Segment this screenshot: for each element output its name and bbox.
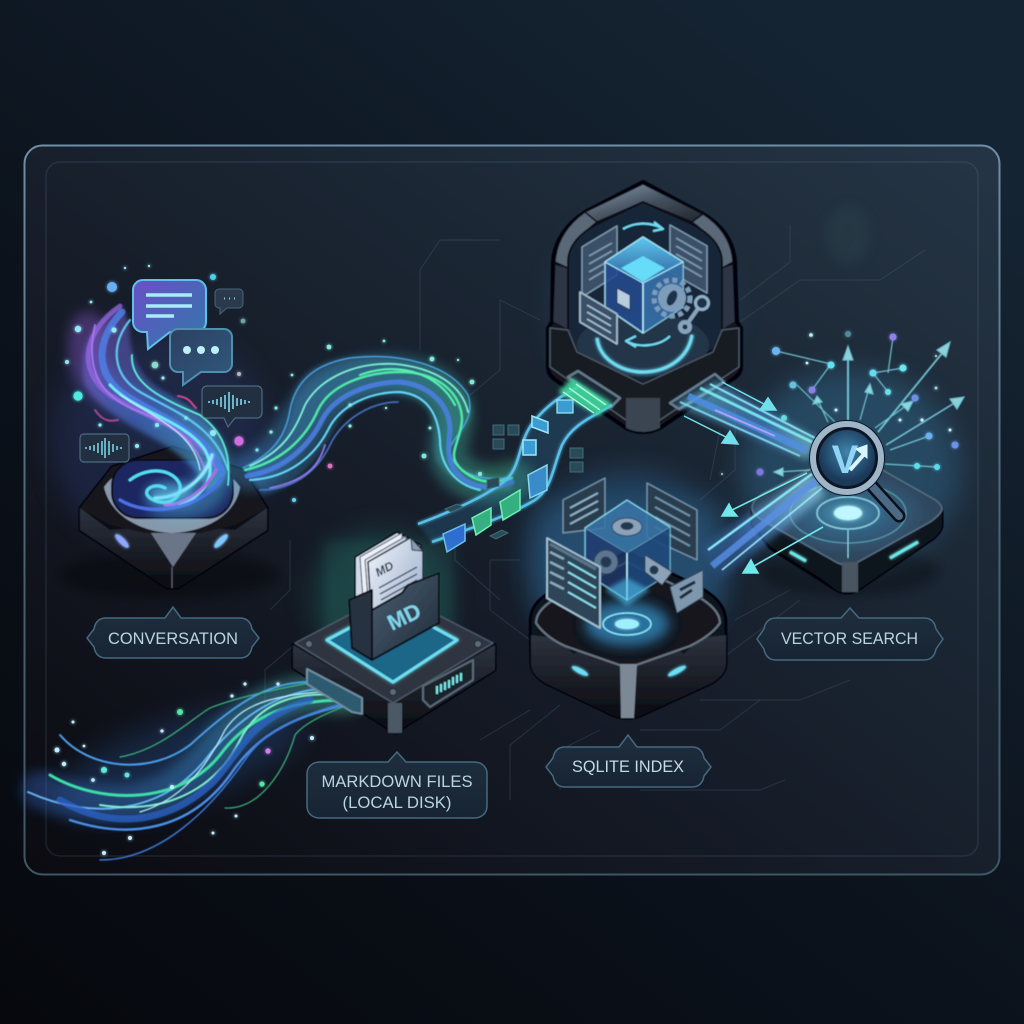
icon: chat bubble with text lines — [133, 280, 206, 349]
top beam light shaft — [844, 275, 848, 345]
icon: glass cube — [605, 237, 683, 333]
icon: audio bubble right — [202, 386, 262, 427]
icon: panel lower left — [580, 292, 617, 344]
arrow: upper beam arrow — [722, 382, 776, 410]
label: conversation — [87, 607, 259, 658]
icon: glowing hologram base — [585, 602, 669, 646]
beam: top device to search — [675, 381, 818, 460]
icon: gear — [654, 280, 690, 316]
icon: chat bubble with dots — [170, 329, 232, 385]
beam: search to sqlite — [702, 472, 825, 582]
particles: bottom-left stream — [54, 682, 314, 855]
nodes: vector points — [721, 331, 958, 476]
icon: markdown document stack: MD — [383, 598, 425, 635]
icon: file blue — [443, 524, 465, 552]
label: sqlite index: SQLITE INDEX — [572, 757, 684, 776]
label: vector search: VECTOR SEARCH — [781, 629, 918, 648]
icon: link connector — [678, 296, 708, 334]
icon: file green — [472, 508, 491, 535]
icon: file blue 4 — [532, 416, 548, 433]
icon: markdown document stack: MD — [373, 558, 396, 580]
node: vector search platform — [752, 450, 942, 596]
icon: magnifying glass — [809, 420, 899, 516]
particles: middle ribbon — [269, 340, 482, 502]
label: sqlite index — [546, 735, 711, 787]
icon: panel top left — [582, 226, 617, 297]
particles: swirl — [65, 265, 259, 452]
icon: markdown document stack — [349, 532, 439, 660]
arrow: lower return arrow — [743, 527, 823, 573]
icon: database cube — [585, 500, 670, 640]
label: markdown files — [307, 752, 487, 818]
icon: gears and link — [594, 518, 703, 613]
icon: glowing ring and rotation arrows — [597, 222, 692, 372]
ribbon: swirl rising from conversation — [83, 306, 229, 509]
ribbon: bottom-left stream into disk — [28, 682, 352, 860]
node: transform capsule device — [548, 182, 741, 432]
icon: small dotted bubble — [215, 289, 243, 314]
icon: audio bubble left — [80, 434, 129, 462]
icon: file blue 3 — [523, 440, 536, 455]
label: conversation: CONVERSATION — [108, 629, 238, 648]
label: markdown files: MARKDOWN FILES — [322, 772, 472, 791]
icon: device output ports — [568, 371, 724, 409]
circuit traces — [265, 225, 925, 800]
data lane with files — [418, 378, 612, 552]
icon: magnifying glass: V — [832, 438, 859, 482]
node: conversation device — [60, 447, 280, 599]
icon: status port — [423, 660, 473, 707]
label: vector search — [757, 608, 943, 660]
faint lens flare — [826, 205, 870, 265]
icon: file slate stack — [445, 425, 583, 539]
ribbon: conversation to data lane — [243, 356, 515, 495]
main glass panel — [24, 146, 1000, 874]
icon: panel top right — [670, 225, 707, 293]
icon: table panel front — [547, 538, 600, 628]
node: markdown local disk — [293, 532, 495, 733]
label: markdown files: (LOCAL DISK) — [342, 793, 452, 812]
icon: file blue 5 — [557, 400, 573, 413]
icon: table panel back left — [563, 478, 605, 533]
icon: file green 2 — [500, 490, 520, 520]
vector rays and nodes — [774, 337, 964, 476]
icon: data port slot — [307, 669, 362, 714]
soft glow behind nodes — [44, 210, 960, 838]
icon: table panel back right — [647, 483, 697, 560]
arrow: lower beam arrow — [684, 416, 738, 444]
icon: file blue 2 — [528, 465, 547, 498]
node: sqlite index device — [530, 478, 726, 718]
arrow: upper return arrow — [722, 473, 807, 516]
